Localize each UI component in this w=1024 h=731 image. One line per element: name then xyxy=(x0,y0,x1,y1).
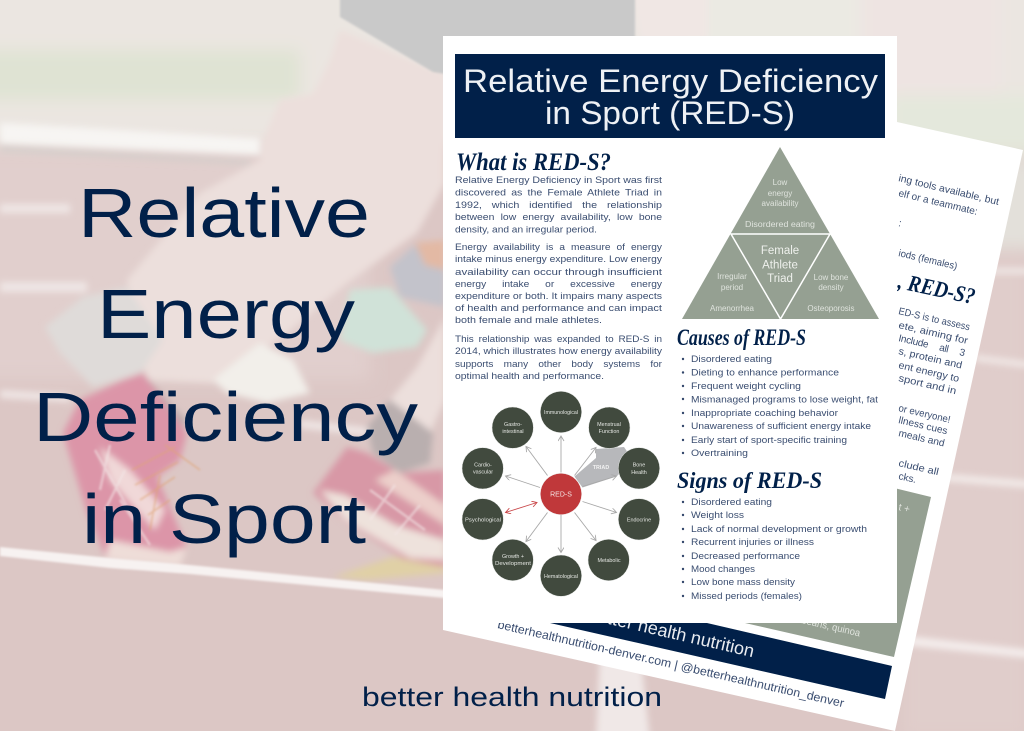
arrows xyxy=(506,436,616,552)
shorts xyxy=(340,0,635,74)
text block: what is RED-S: energy intake or excessive energy xyxy=(455,278,662,289)
left pink shoe xyxy=(63,373,187,567)
list: signs: Disordered eating xyxy=(691,497,772,508)
start line xyxy=(0,547,445,598)
header banner: in Sport (RED-S) xyxy=(545,95,795,131)
labels: Metabolic xyxy=(597,558,621,564)
text block: what is RED-S: 2014, which illustrates how energy availability xyxy=(455,345,662,356)
list: signs: Lack of normal development or growth xyxy=(691,524,867,535)
back page text fragments xyxy=(897,173,1000,486)
background shoes xyxy=(45,287,163,387)
labels: vascular xyxy=(473,470,493,476)
chart: Female Athlete Triad pyramid: Triad xyxy=(767,273,793,285)
list: signs: Decreased performance xyxy=(691,551,800,562)
list: causes: Early start of sport-specific training xyxy=(691,435,847,446)
back page text fragments: ing tools available, but xyxy=(897,173,1000,208)
back page text fragments: Include all 3 xyxy=(897,333,966,359)
orange laces xyxy=(132,445,200,530)
back page text fragments: elf or a teammate: xyxy=(897,188,979,218)
back page text fragments: clude all xyxy=(897,458,940,478)
chart: Female Athlete Triad pyramid: energy xyxy=(768,189,792,198)
back page green box xyxy=(745,487,931,657)
text block: what is RED-S: both female and male athletes. xyxy=(455,314,602,325)
chart: Female Athlete Triad pyramid: Female xyxy=(761,245,799,257)
main title xyxy=(33,174,418,558)
back page footer: betterhealthnutrition-denver.com | @betterhealthnutrition_denver xyxy=(496,617,845,710)
legs xyxy=(127,70,445,383)
main title: in Sport xyxy=(82,480,366,558)
list: causes: Disordered eating xyxy=(691,354,772,365)
system circles xyxy=(462,391,660,596)
text block: what is RED-S: expenditure or both. It impairs many aspects xyxy=(455,290,662,301)
back page xyxy=(443,100,1023,731)
back page text fragments: ent energy to xyxy=(897,360,961,385)
labels: Growth + xyxy=(502,554,524,560)
chart: Female Athlete Triad pyramid: period xyxy=(721,283,743,292)
list: causes: Unawareness of sufficient energy intake xyxy=(691,421,871,432)
text block: what is RED-S: optimal health and performance. xyxy=(455,370,604,381)
labels: Bone xyxy=(633,462,645,468)
labels: Psychological xyxy=(465,518,501,524)
chart: Female Athlete Triad pyramid: Amenorrhea xyxy=(710,304,755,313)
front page xyxy=(443,36,897,623)
labels: Immunological xyxy=(544,410,578,416)
list: signs xyxy=(682,497,867,602)
back page brand band: better health nutrition xyxy=(586,603,756,661)
triad wedge xyxy=(574,447,633,488)
text block: what is RED-S: discovered as the Female Athlete Triad in xyxy=(455,186,662,198)
right pink shoe xyxy=(313,447,445,570)
text block: what is RED-S: between low energy availability, low bone xyxy=(455,211,662,222)
list: signs: Missed periods (females) xyxy=(691,591,802,602)
labels xyxy=(465,410,651,580)
back page text fragments: cks. xyxy=(897,471,917,486)
socks xyxy=(117,373,187,433)
text block: what is RED-S: of health and performance and can impact xyxy=(455,302,662,313)
back page text fragments: or everyone! xyxy=(897,403,951,426)
chart: RED-S body systems diagram xyxy=(462,391,660,596)
back page text fragments: iods (females) xyxy=(897,248,958,272)
list: causes xyxy=(682,354,878,459)
text block: what is RED-S: Relative Energy Deficiency in Sport was first xyxy=(455,174,662,185)
header banner xyxy=(455,54,885,138)
list: signs: Low bone mass density xyxy=(691,577,795,588)
chart: Female Athlete Triad pyramid: Disordered eating xyxy=(745,220,815,229)
text block: what is RED-S: This relationship was expanded to RED-S in xyxy=(455,333,662,344)
text block: what is RED-S: Energy availability is a measure of energy xyxy=(455,241,662,252)
heading: what is RED-S: What is RED-S? xyxy=(456,149,611,176)
chart: RED-S body systems diagram: RED-S xyxy=(550,492,572,498)
text block: what is RED-S: intake minus energy expenditure. Low energy xyxy=(455,253,662,264)
list: signs: Mood changes xyxy=(691,564,755,575)
chart: Female Athlete Triad pyramid: Low bone xyxy=(814,273,849,282)
text block: what is RED-S: density, and an irregular period. xyxy=(455,224,597,234)
back page text fragments: s, protein and xyxy=(897,346,963,372)
back page text fragments: : xyxy=(897,218,903,230)
center circle xyxy=(540,473,582,515)
labels: Endocrine xyxy=(627,518,651,524)
back page text fragments: ete, aiming for xyxy=(897,320,970,347)
white straps xyxy=(95,445,425,545)
triad wedge: TRIAD xyxy=(593,465,609,471)
main title: Deficiency xyxy=(33,378,418,456)
yellow mark xyxy=(333,557,445,580)
text block: what is RED-S: availability can occur through insufficient xyxy=(455,266,662,277)
heading: signs: Signs of RED-S xyxy=(677,468,822,493)
labels: Function xyxy=(599,429,619,435)
text block: what is RED-S: supports many other body systems for xyxy=(455,358,662,369)
list: causes: Overtraining xyxy=(691,448,748,459)
back page text fragments: meals and xyxy=(897,428,946,449)
text block: what is RED-S: 1992, which identified the relationship xyxy=(455,199,662,210)
chart: Female Athlete Triad pyramid: Irregular xyxy=(717,272,747,281)
labels: Hematological xyxy=(544,574,578,580)
list: causes: Inappropriate coaching behavior xyxy=(691,408,839,419)
chart: Female Athlete Triad pyramid: Low xyxy=(773,178,788,187)
header banner: Relative Energy Deficiency xyxy=(463,63,878,99)
back page green box: t + xyxy=(897,502,911,516)
text block: what is RED-S xyxy=(455,174,662,381)
back page brand band xyxy=(550,603,892,699)
labels: Menstrual xyxy=(597,422,621,428)
labels: Gastro- xyxy=(504,422,522,428)
list: causes: Mismanaged programs to lose weight, fat xyxy=(691,394,878,406)
chart: Female Athlete Triad pyramid: availability xyxy=(762,199,798,208)
chart: Female Athlete Triad pyramid xyxy=(682,147,879,319)
labels: Cardio- xyxy=(474,462,492,468)
main title: Relative xyxy=(78,174,370,252)
back page green box: beans, quinoa xyxy=(800,615,862,640)
main title: Energy xyxy=(97,275,355,353)
list: causes: Dieting to enhance performance xyxy=(691,368,839,378)
list: causes: Frequent weight cycling xyxy=(691,381,801,392)
chart: Female Athlete Triad pyramid: Athlete xyxy=(762,260,798,272)
labels: Health xyxy=(631,470,647,476)
labels: Development xyxy=(495,561,532,567)
brand name: better health nutrition xyxy=(362,682,662,712)
right side lane lines xyxy=(970,268,1024,274)
chart: Female Athlete Triad pyramid: Osteoporosis xyxy=(807,304,855,313)
back page text fragments: ED-S is to assess xyxy=(897,306,971,333)
list: signs: Recurrent injuries or illness xyxy=(691,537,814,548)
heading: causes: Causes of RED-S xyxy=(677,325,806,350)
back page text fragments: llness cues xyxy=(897,415,949,437)
labels: intestinal xyxy=(502,429,524,435)
back page heading: , RED-S? xyxy=(895,268,977,309)
lane lines xyxy=(0,123,260,155)
back page text fragments: sport and in xyxy=(897,373,957,397)
chart: Female Athlete Triad pyramid: density xyxy=(818,283,844,292)
list: signs: Weight loss xyxy=(691,510,744,521)
